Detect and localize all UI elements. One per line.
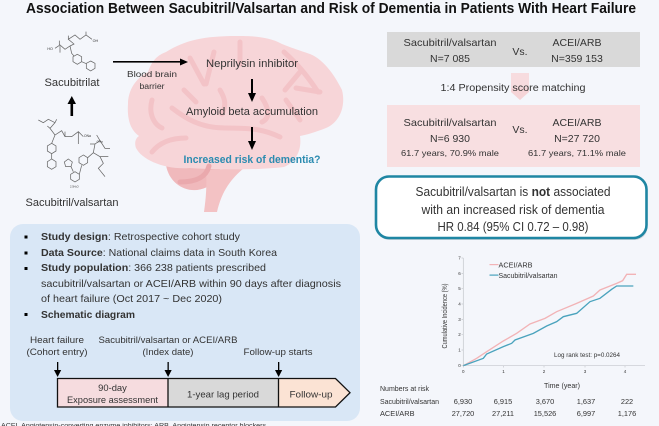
callout: conclusion: with an increased risk of dementia — [421, 203, 604, 217]
table: numbers at risk: 15,526 — [534, 409, 556, 418]
text: increased risk of dementia: Increased risk of dementia? — [184, 154, 321, 166]
panel: matched cohort: Sacubitril/valsartan — [404, 117, 497, 129]
timeline bar — [58, 378, 350, 407]
tick labels: 1 — [502, 369, 505, 374]
callout: conclusion: HR 0.84 (95% CI 0.72 – 0.98) — [438, 220, 588, 234]
schematic labels — [26, 335, 313, 357]
panel: matched cohort: 61.7 years, 71.1% male — [528, 148, 626, 158]
panel: matched cohort: Vs. — [512, 124, 528, 136]
molecule: sacubitrilat — [47, 32, 99, 71]
table: numbers at risk: 6,930 — [454, 397, 472, 406]
table: numbers at risk: Sacubitril/valsartan — [380, 397, 439, 406]
panel: matched cohort: N=6 930 — [430, 133, 470, 145]
curve: ACEI/ARB — [463, 274, 636, 366]
label: blood brain barrier — [127, 69, 177, 91]
study details list: of heart failure (Oct 2017 ~ Dec 2020) — [41, 294, 222, 305]
legend — [490, 262, 558, 280]
tick labels: 0 — [462, 369, 465, 374]
panel: unmatched cohort: N=7 085 — [430, 53, 470, 65]
study details list: Study design: Retrospective cohort study — [41, 232, 241, 243]
schematic labels: Follow-up starts — [244, 347, 313, 357]
axis title: y: Cumulative Incidence (%) — [440, 284, 449, 348]
table: numbers at risk — [380, 384, 636, 418]
tick labels: 3 — [584, 369, 587, 374]
timeline bar: Exposure assessment — [67, 394, 158, 405]
legend: Sacubitril/valsartan — [498, 273, 558, 280]
curve: sacubitril/valsartan — [463, 286, 633, 366]
schematic arrows — [54, 362, 282, 377]
molecule: sacubitril/valsartan — [38, 119, 110, 189]
timeline bar: Follow-up — [290, 388, 332, 400]
tick labels: 4 — [458, 302, 461, 306]
callout: conclusion: Sacubitril/valsartan is not associated — [416, 185, 610, 199]
panel: matched cohort: 61.7 years, 70.9% male — [401, 148, 499, 158]
table: numbers at risk: 27,211 — [492, 409, 514, 418]
tick labels: 4 — [624, 369, 627, 374]
tick labels — [458, 256, 627, 374]
table: numbers at risk: 1,176 — [618, 409, 636, 418]
tick labels: 2 — [458, 332, 461, 337]
schematic labels: Heart failure — [30, 335, 84, 345]
tick labels: 1 — [458, 348, 461, 352]
schematic labels: Sacubitril/valsartan or ACEI/ARB — [98, 335, 238, 345]
tick labels: 6 — [458, 271, 461, 276]
molecule: sacubitrilat: OH — [93, 39, 99, 43]
panel: unmatched cohort — [387, 32, 640, 67]
table: numbers at risk: 6,915 — [494, 397, 512, 406]
panel: unmatched cohort: ACEI/ARB — [552, 37, 602, 49]
study details list: Data Source: National claims data in South Korea — [41, 248, 277, 259]
schematic labels: (Cohort entry) — [26, 347, 88, 357]
study details list: Schematic diagram — [41, 310, 135, 321]
label: blood brain barrier: Blood brain — [127, 69, 177, 79]
table: numbers at risk: Numbers at risk — [380, 384, 429, 393]
chart: cumulative incidence — [440, 256, 645, 390]
text: neprilysin inhibitor: Neprilysin inhibitor — [206, 58, 298, 70]
label: blood brain barrier: barrier — [139, 81, 165, 91]
table: numbers at risk: 6,997 — [577, 409, 595, 418]
molecule: sacubitril/valsartan: 2.5H₂O — [70, 185, 79, 189]
table: numbers at risk: 1,637 — [577, 397, 595, 406]
tick labels: 3 — [458, 317, 461, 322]
icon: brain — [128, 36, 343, 212]
molecule: sacubitril/valsartan: ONa — [84, 134, 91, 138]
timeline bar: 90-day — [98, 382, 127, 393]
table: numbers at risk: ACEI/ARB — [380, 409, 415, 418]
arrow: blood brain barrier — [113, 58, 188, 66]
arrow: neprilysin to amyloid — [248, 79, 256, 102]
panel: matched cohort — [387, 105, 640, 167]
molecule: sacubitril/valsartan: ONa — [97, 140, 103, 144]
tick labels: 7 — [458, 256, 461, 260]
study details list — [24, 232, 341, 321]
table: numbers at risk: 3,670 — [536, 397, 554, 406]
panel: unmatched cohort: Vs. — [512, 46, 528, 58]
title: Association Between Sacubitril/Valsartan and Risk of Dementia in Patients With Heart Failure — [26, 1, 636, 17]
arrow: amyloid to dementia — [248, 127, 256, 150]
panel: matched cohort: ACEI/ARB — [552, 117, 602, 129]
panel: unmatched cohort: Sacubitril/valsartan — [404, 37, 497, 49]
table: numbers at risk: 222 — [621, 397, 633, 406]
axis title: x: Time (year) — [544, 381, 580, 390]
panel: study design — [10, 224, 360, 421]
study details list: Study population: 366 238 patients prescribed — [41, 263, 266, 274]
panel: unmatched cohort: N=359 153 — [551, 53, 603, 65]
arrow: valsartan to sacubitrilat — [68, 96, 76, 116]
tick labels: 5 — [458, 286, 461, 291]
molecule: sacubitrilat: HO — [47, 47, 53, 51]
tick labels: 2 — [543, 369, 546, 374]
label: sacubitril/valsartan: Sacubitril/valsartan — [26, 197, 118, 209]
log rank: Log rank test: p=0.0264 — [554, 352, 620, 359]
text: amyloid beta: Amyloid beta accumulation — [186, 106, 318, 118]
study details list: sacubitril/valsartan or ACEI/ARB within 90 days after diagnosis — [41, 279, 341, 290]
legend: ACEI/ARB — [498, 262, 533, 270]
tick labels: 0 — [458, 363, 461, 368]
label: sacubitrilat: Sacubitrilat — [44, 77, 100, 89]
axes — [462, 258, 645, 368]
timeline bar: 1-year lag period — [187, 388, 259, 400]
schematic labels: (Index date) — [142, 347, 194, 357]
arrow: propensity matching — [511, 73, 529, 100]
table: numbers at risk: 27,720 — [452, 409, 474, 418]
text: propensity score matching: 1:4 Propensity score matching — [440, 83, 586, 94]
panel: matched cohort: N=27 720 — [554, 133, 600, 145]
callout: conclusion — [376, 176, 648, 240]
